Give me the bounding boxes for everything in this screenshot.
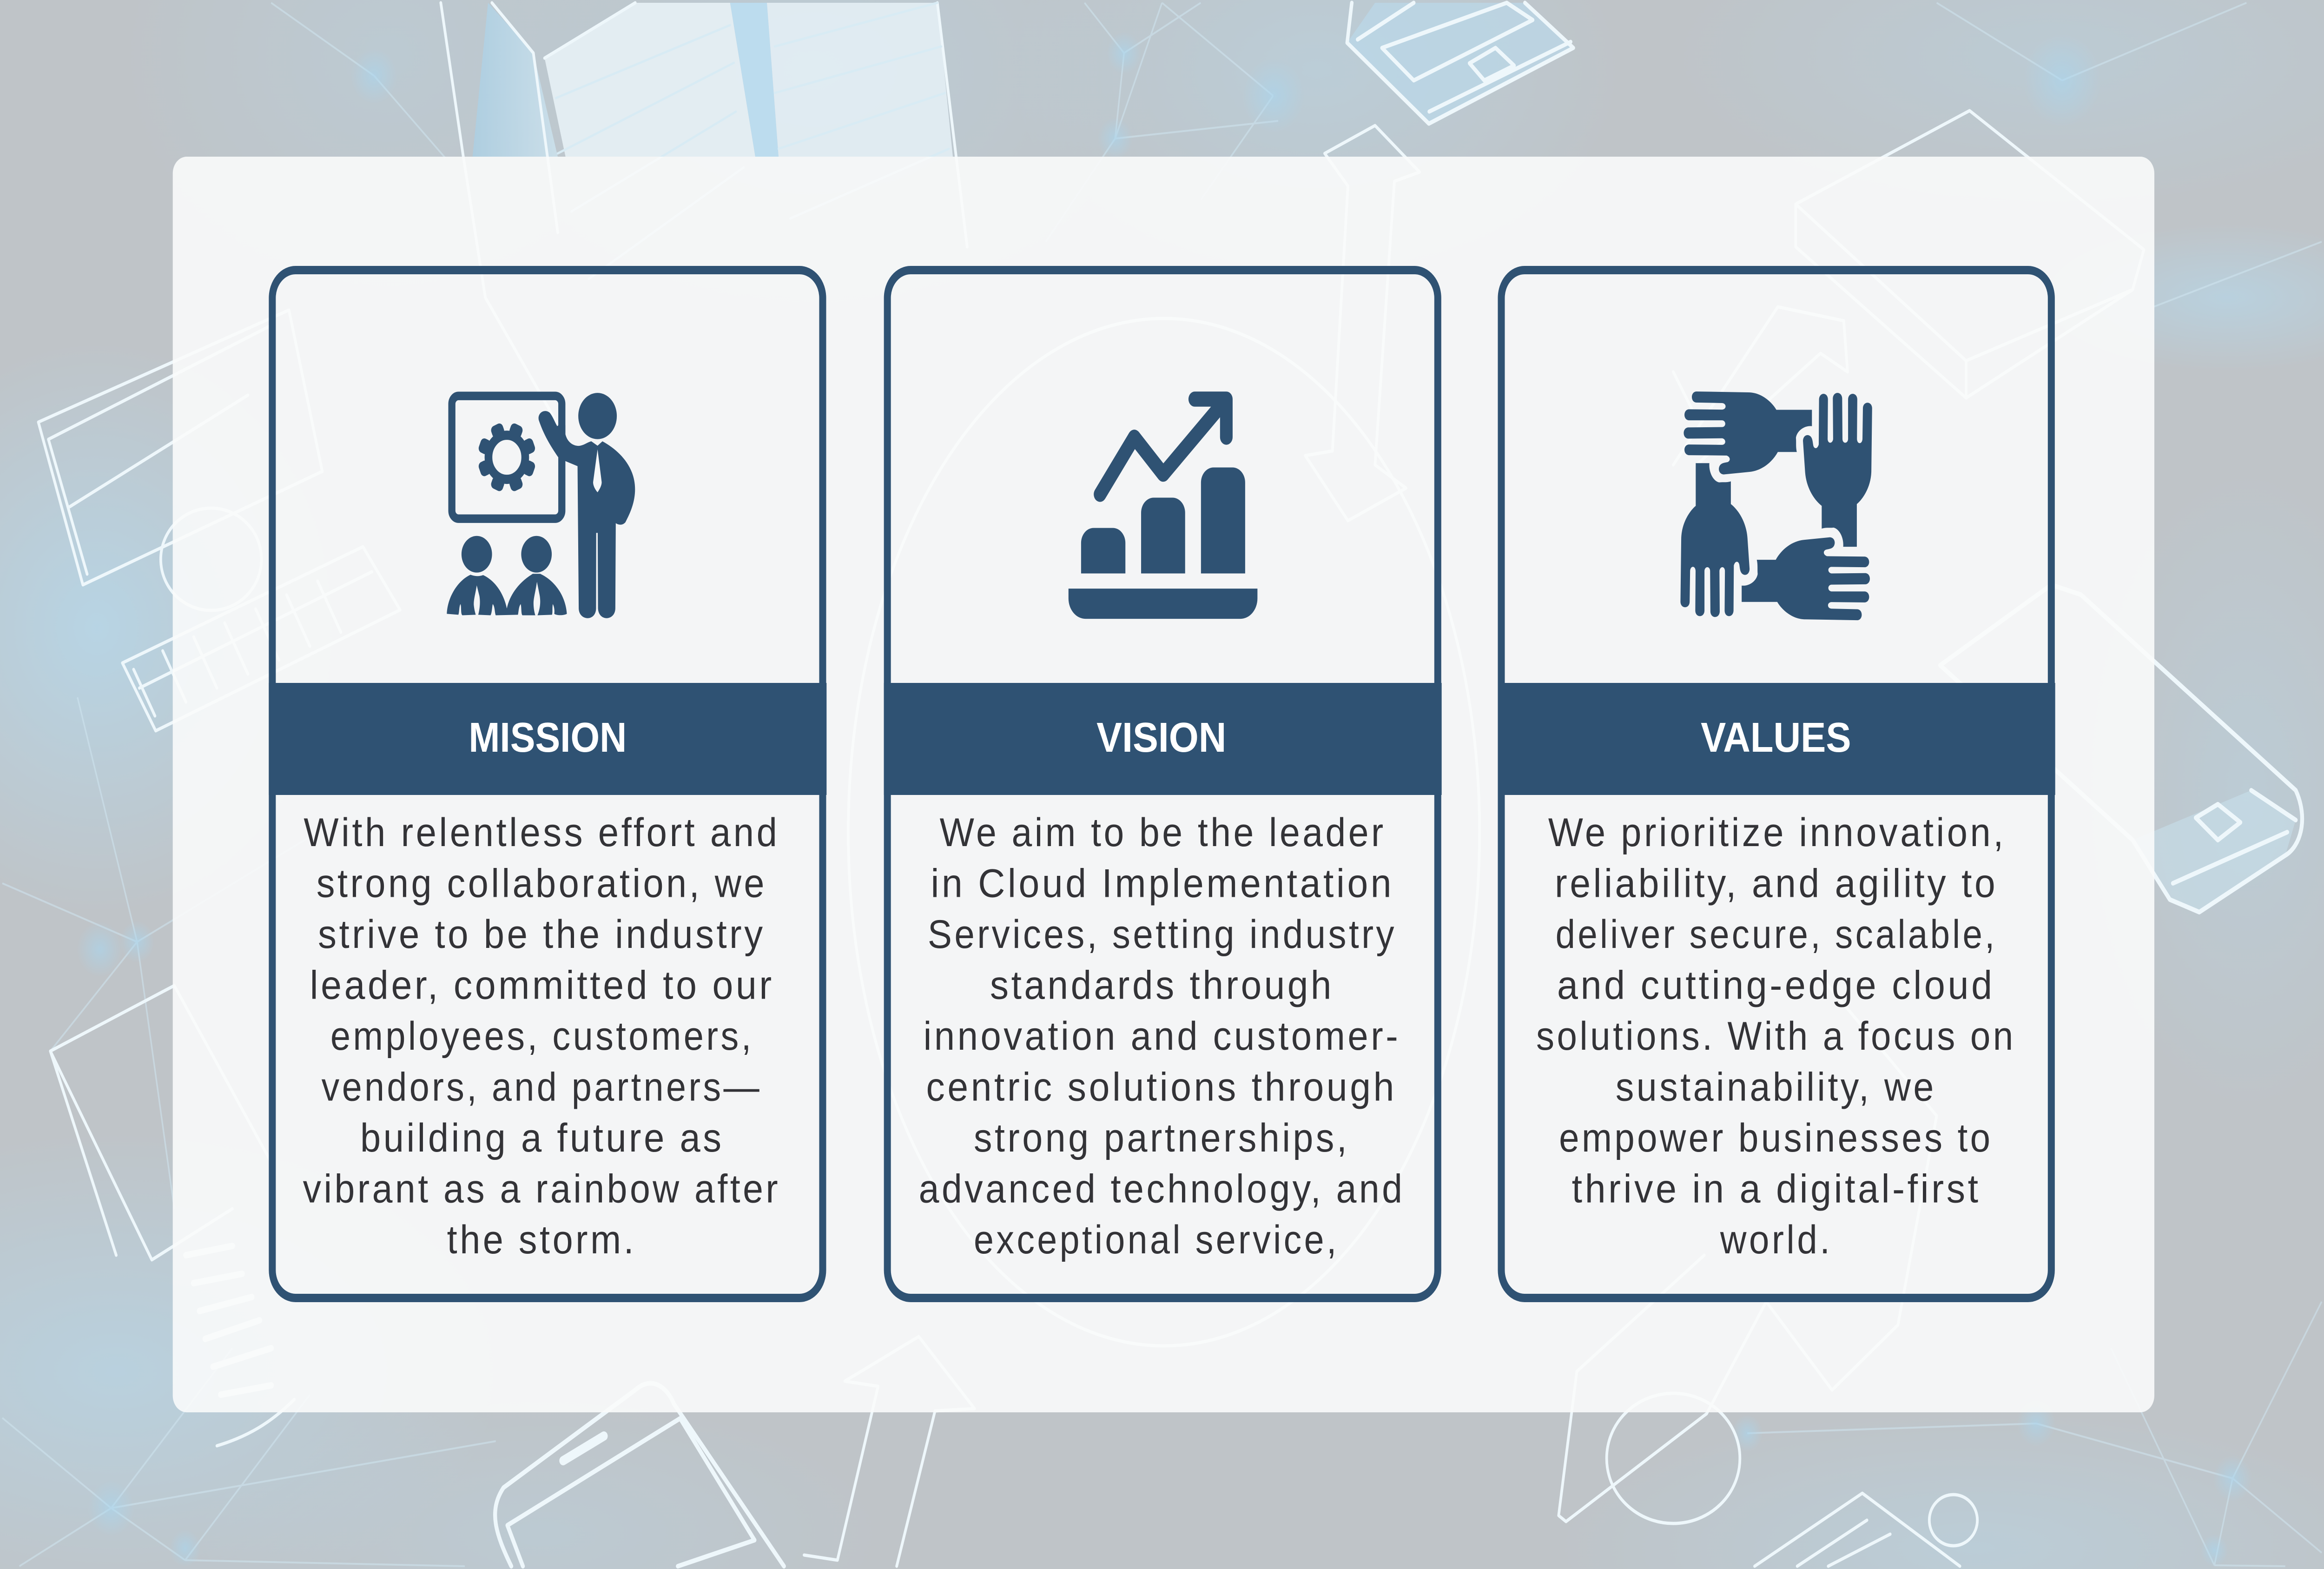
text block: vision: advanced technology, and xyxy=(919,1166,1405,1211)
heading band: values xyxy=(1498,683,2055,795)
text block: vision: innovation and customer- xyxy=(924,1013,1400,1058)
panel: mission card xyxy=(269,270,826,1298)
text block: values: We prioritize innovation, xyxy=(1548,810,2006,854)
text block: vision: exceptional service, xyxy=(974,1217,1339,1262)
text block: mission xyxy=(303,810,780,1262)
text block: mission: strong collaboration, we xyxy=(317,861,767,906)
icon: four interlocking hands xyxy=(1680,391,1872,620)
text block: mission: employees, customers, xyxy=(330,1013,754,1058)
text block: values xyxy=(1536,810,2016,1262)
heading band: mission: MISSION xyxy=(469,714,627,761)
bottom arrow xyxy=(804,1337,975,1566)
text block: values: empower businesses to xyxy=(1559,1115,1993,1160)
text block: values: deliver secure, scalable, xyxy=(1556,912,1997,956)
text block: vision: in Cloud Implementation xyxy=(931,861,1394,906)
text block: mission: building a future as xyxy=(360,1115,724,1160)
text block: values: solutions. With a focus on xyxy=(1536,1013,2016,1058)
icon: presenter with gear and audience xyxy=(447,393,635,618)
text block: values: thrive in a digital-first xyxy=(1572,1166,1981,1211)
text block: vision: standards through xyxy=(990,962,1334,1007)
text block: mission: With relentless effort and xyxy=(304,810,780,854)
text block: mission: the storm. xyxy=(447,1217,636,1262)
heading band: mission xyxy=(269,683,826,795)
panel: values card xyxy=(1498,270,2055,1298)
heading band: vision: VISION xyxy=(1096,714,1226,761)
text block: mission: vendors, and partners— xyxy=(322,1064,762,1109)
left laptop and keyboard xyxy=(38,310,322,585)
text block: mission: strive to be the industry xyxy=(318,912,766,956)
bottom phone xyxy=(495,1384,784,1566)
top laptop xyxy=(1347,3,1573,124)
text block: values: world. xyxy=(1720,1217,1833,1262)
large circle xyxy=(848,318,1479,1346)
heading band: values: VALUES xyxy=(1701,714,1851,761)
text block: mission: leader, committed to our xyxy=(310,962,774,1007)
heading band: vision xyxy=(884,683,1442,795)
bottom-right circle, keyboard, mouse xyxy=(1607,1393,1740,1523)
text block: vision xyxy=(919,810,1405,1262)
panel: vision card xyxy=(884,270,1442,1298)
text block: values: sustainability, we xyxy=(1616,1064,1936,1109)
right phone xyxy=(2133,790,2296,912)
text block: mission: vibrant as a rainbow after xyxy=(303,1166,780,1211)
right lower laptop xyxy=(1558,976,1937,1522)
top-right package xyxy=(1796,111,2144,398)
text block: vision: centric solutions through xyxy=(926,1064,1397,1109)
text block: values: and cutting-edge cloud xyxy=(1557,962,1995,1007)
lower-left shapes xyxy=(50,986,271,1260)
text block: vision: strong partnerships, xyxy=(974,1115,1349,1160)
text block: values: reliability, and agility to xyxy=(1555,861,1998,906)
top centre arrow xyxy=(1305,126,1419,521)
icon: growth chart with arrow xyxy=(1069,399,1257,619)
text block: vision: We aim to be the leader xyxy=(940,810,1386,854)
text block: vision: Services, setting industry xyxy=(928,912,1397,956)
panel: translucent white container xyxy=(173,157,2154,1412)
